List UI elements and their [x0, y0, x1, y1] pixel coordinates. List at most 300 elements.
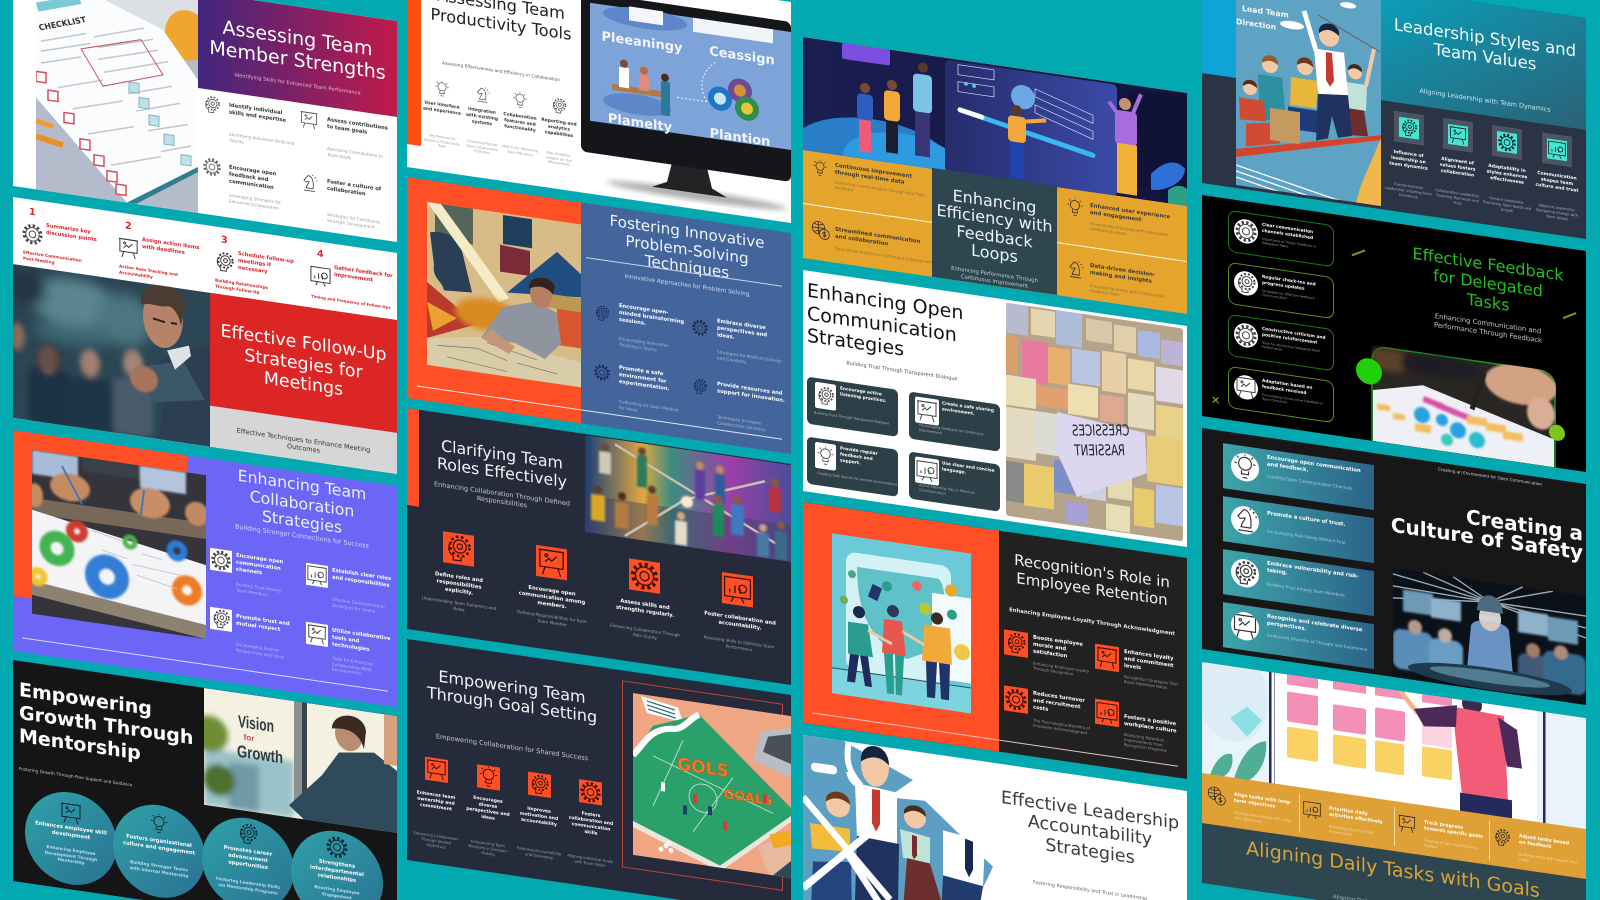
image: hands drawing gears	[32, 450, 206, 640]
subtitle: Empowering Collaboration for Shared Success	[436, 732, 588, 762]
item: prioritize	[1301, 793, 1393, 847]
item note: Creating Open Communication Channels	[1267, 473, 1352, 491]
item title: Fosters a positive workplace culture	[1124, 714, 1177, 734]
item title: Foster a culture of collaboration	[327, 179, 381, 197]
orange block	[407, 177, 581, 423]
icon: bulb	[150, 814, 168, 834]
card: diverse perspectives	[1223, 602, 1374, 669]
item: streamlined	[811, 216, 929, 273]
panel: Fostering Innovative Problem-Solving	[407, 177, 791, 454]
item 1	[22, 206, 97, 265]
icon box	[306, 622, 328, 647]
title: Accountability	[1028, 812, 1152, 850]
icon: person	[216, 252, 234, 272]
item: communication	[1532, 128, 1582, 231]
item: loyalty	[1095, 643, 1183, 703]
title: Employee Retention	[1016, 569, 1168, 609]
item note: Building Stronger Teams with Internal Mentorship	[130, 859, 188, 878]
item note: Creating a Daily Goal-Tracking System	[1424, 838, 1477, 850]
item: adaptability	[1482, 121, 1532, 224]
image: Vision for Growth: Growth	[237, 742, 283, 767]
item note: Timing and Frequency of Follow-Ups	[311, 293, 391, 310]
item note: Enhancing Employee Development Through Mentorship	[45, 844, 97, 866]
item: perspectives	[691, 313, 787, 377]
subtitle: Enhancing Employee Loyalty Through Acknowledgment	[1009, 607, 1175, 637]
icon box	[1095, 699, 1119, 727]
title: Roles Effectively	[437, 453, 567, 491]
item title: Enhances employee skill development	[35, 820, 107, 841]
icon	[513, 92, 527, 108]
item title: Align tasks with long-term objectives	[1234, 793, 1292, 809]
circle item 2	[113, 799, 205, 900]
title: Communication	[807, 302, 957, 346]
item title: Recognize and celebrate diverse perspectives.	[1267, 613, 1362, 633]
icon box	[1095, 644, 1119, 672]
panel: Recognition's Role in Employee Retention	[803, 502, 1187, 779]
item note: Understanding Team Dynamics and Roles	[422, 595, 496, 612]
item title: Track progress towards specific goals	[1424, 820, 1483, 840]
panel: Enhancing Open Communication	[803, 270, 1187, 547]
panel: Effective Feedback for Delegated Tasks	[1202, 195, 1586, 472]
item note: Building Trust Through Transparent Dialogue	[814, 411, 889, 426]
number: 1	[29, 206, 36, 218]
image: desktop monitor: Plantion	[710, 126, 770, 150]
item note: Data Analytics: Insights on Tool Effectiveness	[546, 150, 572, 167]
icon box	[1394, 111, 1424, 145]
item note: Enhancing Collaboration Through Role Clarity	[610, 623, 680, 640]
item title: Clear communication channels established	[1262, 223, 1313, 241]
title: Effective Feedback	[1412, 244, 1564, 285]
item title: Fosters organizational culture and engagement	[123, 834, 195, 856]
image: goals field: GOLS	[677, 755, 729, 782]
title: Through Goal Setting	[427, 683, 597, 727]
illustration: celebrating team: Lead Team	[1242, 4, 1289, 20]
title	[19, 679, 193, 765]
item title: Constructive criticism and positive reinforcement	[1262, 327, 1326, 345]
icon box	[815, 442, 836, 471]
title: Leadership Styles and	[1394, 15, 1576, 61]
left divider	[803, 203, 932, 223]
item note: Key Features to Assess in Productivity Tools	[424, 133, 460, 149]
item title: Identify individual skills and expertise	[229, 103, 286, 124]
item title: Communication shapes team culture and trust	[1535, 171, 1579, 194]
subtitle: Effective Techniques to Enhance Meeting	[237, 427, 370, 454]
item note: Effective Communication Strategies for Teams	[332, 597, 385, 613]
item note: Data-Driven Insights for Continuous Improvement	[835, 246, 932, 265]
item: align tasks	[1206, 780, 1298, 833]
subtitle: Building Trust Through Transparent Dialogue	[846, 360, 958, 383]
item title: Improves motivation and accountability	[520, 807, 558, 828]
image: checklist on desk: CHECKLIST	[38, 15, 88, 32]
item title: Create a safe sharing environment.	[942, 401, 994, 417]
item note: Fostering Leadership Skills via Mentorship Programs	[216, 876, 280, 895]
item note: Leveraging Strengths for Enhanced Collaboration	[229, 193, 281, 210]
item note: Building Trust Among Team Members	[1267, 581, 1345, 598]
image: futuristic team table	[1393, 568, 1586, 705]
item 2	[118, 220, 200, 279]
icon	[691, 376, 709, 397]
accent cross: ✕	[1211, 393, 1220, 408]
title: Techniques	[645, 252, 729, 282]
icon: phone feedback	[310, 266, 331, 287]
illustration: leadership team	[803, 735, 999, 900]
icon	[1207, 785, 1227, 808]
icon box	[1004, 629, 1028, 658]
panel: Effective Follow-Up Strategies	[13, 197, 397, 474]
item note: Building Habits that Support Your Goals	[1519, 852, 1577, 865]
item: morale	[1004, 629, 1092, 690]
item: contributions	[300, 111, 388, 160]
illustration: celebrating team	[1236, 0, 1381, 206]
image: hand marking stars	[1371, 345, 1556, 468]
image: sticky notes wall: CRESSICES	[1071, 423, 1130, 440]
item title: Adaptation based on feedback received	[1262, 379, 1312, 396]
icon box	[629, 558, 660, 594]
image: colourful team with ladders	[585, 435, 791, 562]
image: man pointing	[13, 264, 210, 447]
icon box	[210, 607, 232, 632]
item title: Encourage open-minded brainstorming sessions.	[619, 303, 684, 326]
title	[990, 786, 1190, 877]
item title: Streamlined communication and collaboration	[835, 227, 920, 247]
orange strip	[407, 0, 421, 146]
item note: Building Relationships Through Follow-Up	[215, 277, 268, 295]
title: Feedback	[956, 221, 1033, 251]
icon: presentation board	[300, 111, 318, 130]
header band with title	[198, 0, 397, 117]
subtitle: Building Stronger Connections for Success	[235, 523, 369, 550]
icon box	[536, 545, 567, 580]
icon	[811, 219, 831, 242]
title: Effective Follow-Up	[220, 321, 386, 365]
item: turnover	[1004, 684, 1092, 745]
subtitle: Enhancing Communication and	[1435, 312, 1541, 335]
item: influence	[1384, 107, 1433, 210]
subtitle: Enhancing Collaboration Through Defined	[434, 480, 570, 508]
item note: Defining Responsibilities for Each Team Member	[517, 609, 587, 627]
item note: Streamlining Processes with Automated Feedback Systems	[1090, 221, 1167, 237]
panel: Enhancing Efficiency with Feedback Loops	[803, 37, 1187, 314]
title: Creating a	[1466, 505, 1583, 546]
title	[412, 664, 612, 729]
icon	[593, 303, 611, 324]
icon	[1397, 812, 1417, 835]
subtitle	[1388, 305, 1588, 351]
item: communication skills	[567, 777, 615, 884]
panel: Empowering Growth Through Mentorship	[13, 660, 397, 900]
item: define roles	[419, 528, 499, 631]
item note: Servant Leadership: Prioritizing Team Needs and Growth	[1483, 196, 1531, 213]
item title: Encourage open communication among members.	[519, 585, 585, 610]
title: Member Strengths	[209, 37, 386, 84]
number: 3	[221, 234, 228, 246]
title: Clarifying Team	[441, 436, 563, 473]
card: vulnerability	[1223, 549, 1374, 616]
icon box	[443, 531, 474, 567]
item title: User interface and experience	[423, 101, 461, 117]
icon: chess knight	[304, 174, 318, 192]
item title: Enhanced user experience and engagement	[1090, 203, 1170, 223]
item title: Establish clear roles and responsibilities	[332, 568, 391, 589]
card: criticism	[1228, 314, 1334, 371]
icon	[1065, 196, 1085, 219]
icon: gear badge	[203, 158, 221, 176]
title: Loops	[971, 241, 1018, 267]
circle item 3	[202, 812, 294, 900]
item note: Importance of Timely Feedback in Delegated Tasks	[1262, 237, 1316, 249]
panel: Assessing Team Member Strengths	[13, 0, 397, 242]
image: goals field	[633, 693, 791, 878]
item note: Active Listening: Key to Effective Communication	[919, 483, 975, 495]
item: features	[502, 92, 538, 157]
item title: Reduces turnover and recruitment costs	[1033, 691, 1085, 712]
icon circle	[1231, 451, 1259, 483]
title: Strategies for	[244, 345, 363, 383]
image: goals field: GOALS	[723, 787, 773, 809]
number: 2	[125, 220, 132, 232]
icon	[593, 362, 611, 383]
title: Tasks	[1467, 290, 1509, 315]
title: Mentorship	[19, 725, 141, 765]
subtitle band	[210, 406, 397, 474]
item note: Enhancing Communication Through Real-Time Feedback	[835, 180, 925, 198]
item note: Cultivating an Open Mindset for Ideas	[619, 399, 679, 413]
item note: Encouraging Feedback for Continuous Improvement	[919, 423, 983, 436]
title: Effective Leadership	[1001, 788, 1179, 834]
item 3	[215, 234, 294, 295]
item title: Define roles and responsibilities explicitly.	[435, 571, 483, 596]
icon circle	[1231, 557, 1259, 589]
item note: Metrics for Measuring Team Efficiency	[502, 144, 538, 157]
item title: Provide regular feedback and support.	[840, 446, 878, 466]
panel: Assessing Team Productivity Tools	[407, 0, 791, 223]
icon	[691, 317, 709, 338]
item title: Promote a culture of trust.	[1267, 510, 1346, 528]
image: sticky notes wall	[1006, 303, 1183, 541]
icon	[477, 87, 490, 103]
circle item 1	[25, 786, 117, 891]
item note: Aligning Daily Actions with Long-Term Objectives	[1234, 811, 1291, 823]
item: perspectives	[465, 762, 513, 869]
item: culture	[1095, 698, 1183, 758]
item note: Encouraging Diverse Perspectives and Ideas	[236, 642, 284, 659]
item note: Recognition Strategies That Boost Retention Rates	[1124, 674, 1178, 690]
title: for Delegated	[1433, 266, 1543, 301]
circle item 4	[291, 825, 383, 900]
item: open channels	[210, 548, 283, 597]
title: Problem-Solving	[625, 231, 749, 267]
subtitle: Fostering Growth Through Peer Support and Guidance	[19, 766, 132, 787]
item note: Measuring Retention Improvements from Recognition Programs	[1124, 732, 1167, 753]
item: open feedback	[203, 158, 281, 210]
icon	[1492, 826, 1512, 849]
card: trust	[1223, 496, 1374, 563]
icon box	[915, 456, 939, 486]
icon	[435, 80, 449, 96]
icon circle	[1234, 270, 1258, 297]
title block	[932, 168, 1057, 295]
title: Efficiency with	[936, 201, 1053, 236]
panel: Leadership Styles and Team Values	[1202, 0, 1586, 239]
image frame	[622, 680, 783, 891]
right divider	[1057, 242, 1187, 262]
subtitle: Innovative Approaches for Problem Solving	[625, 274, 749, 298]
item note: Encouraging Constructive Feedback in Team Dynamics	[1262, 393, 1323, 406]
item: user experience	[1065, 193, 1185, 255]
image: Vision for Growth	[204, 688, 397, 833]
item: continuous improvement	[811, 156, 929, 217]
item title: Embrace vulnerability and risk-taking.	[1267, 560, 1359, 580]
title	[238, 466, 366, 537]
item title: Boosts employee morale and satisfaction	[1033, 635, 1083, 659]
icon circle	[1234, 374, 1258, 401]
item note: Empowering Teams with Collaborative Feedback Tools	[1090, 283, 1164, 299]
item note: Action Item Tracking and Accountability	[119, 263, 178, 279]
panel: Creating a Culture of Safety	[1202, 428, 1586, 705]
item note: Techniques to Inspire Collaborative Solutions	[717, 414, 765, 432]
icon: board	[118, 238, 138, 259]
card: sharing	[909, 391, 1000, 452]
item title: Schedule follow-up meetings if necessary	[238, 251, 294, 275]
item title: Use clear and concise language.	[942, 461, 994, 476]
item note: Assessing Skills to Optimize Team Performance	[704, 634, 774, 652]
title: Strategies	[807, 325, 904, 361]
title	[587, 209, 787, 291]
item title: Encourage open communication channels	[236, 553, 283, 576]
item title: Continuous improvement through real-time data	[835, 163, 912, 186]
icon box	[1004, 685, 1028, 714]
item title: Enhances team ownership and commitment	[417, 790, 455, 813]
item: data-driven	[1065, 255, 1185, 314]
item title: Enhances loyalty and commitment levels	[1124, 649, 1174, 671]
item note: Comparing Popular Team Collaboration Platforms	[466, 139, 498, 155]
item note: Aligning Individual Goals with Team Vision	[567, 853, 613, 868]
item title: Encourage active listening practices.	[840, 386, 886, 404]
item: trust	[210, 606, 290, 659]
item title: Utilize collaborative tools and technologies	[332, 628, 391, 653]
item title: Fosters collaboration and communication skills	[569, 811, 613, 837]
subtitle: Creating an Environment for Open Communication	[1438, 466, 1542, 487]
panel: Enhancing Team Collaboration	[13, 430, 397, 707]
subtitle: Outcomes	[287, 442, 320, 455]
image: Vision for Growth: for	[244, 733, 254, 743]
orange accent block	[13, 430, 187, 621]
item note: Adaptive Leadership: Navigating Change with Team Values	[1536, 203, 1578, 221]
icon box	[477, 764, 500, 791]
item title: Promote a safe environment for experimentation.	[619, 365, 670, 392]
icon: gears	[326, 836, 348, 858]
item note: Strategies for Problem-Solving and Creativity	[717, 349, 781, 364]
icon	[1065, 258, 1085, 281]
item title: Promote trust and mutual respect	[236, 614, 290, 633]
item: reporting	[539, 91, 579, 167]
item: accountability	[698, 568, 784, 673]
subtitle: Assessing Effectiveness and Efficiency in Collaboration	[442, 61, 560, 83]
item: tools	[306, 622, 391, 676]
item: collaboration culture	[304, 174, 382, 229]
item title: Promotes career advancement opportunities	[224, 845, 272, 871]
header band	[1381, 0, 1586, 130]
subtitle: Continuous Improvement	[961, 274, 1028, 290]
item note: Effective Communication Post-Meeting	[23, 249, 82, 265]
title: Empowering Team	[438, 667, 586, 707]
icon: gear	[22, 224, 43, 244]
item note: Strategies for Effective Feedback Communication	[1262, 289, 1315, 301]
icon box	[815, 382, 836, 411]
item: alignment	[1433, 114, 1482, 217]
item: open communication	[512, 541, 592, 645]
illustration: handshake	[832, 533, 971, 714]
icon circle	[1234, 218, 1258, 245]
item title: Encourage open feedback and communication	[229, 165, 276, 191]
item note: Identifying Individual Skills and Talents	[229, 132, 294, 146]
item note: Tools for Monitoring Delegated Work Performance	[1262, 341, 1320, 353]
title	[1381, 13, 1589, 81]
item title: Assess skills and strengths regularly.	[616, 598, 674, 619]
title	[1388, 240, 1588, 326]
title: Meetings	[264, 369, 343, 400]
title: Empowering	[19, 679, 152, 720]
panel: Effective Leadership Accountability	[803, 735, 1187, 900]
icon	[811, 157, 829, 180]
left accent	[1202, 0, 1236, 78]
icon box	[528, 772, 551, 798]
card: clear language	[909, 451, 1000, 512]
orange strip	[407, 408, 419, 507]
icon circle	[1231, 504, 1259, 536]
title: Fostering Innovative	[609, 212, 765, 252]
subtitle: Responsibilities	[477, 495, 527, 510]
item note: Collaborative Leadership: Fostering Teamwork and Trust	[1435, 188, 1480, 206]
title: Enhancing Open	[807, 280, 963, 324]
item 4	[310, 248, 393, 310]
item note: Assessing Contributions to Team Goals	[327, 146, 383, 160]
subtitle: Enhancing Performance Through	[951, 266, 1038, 284]
title: Strategies	[1045, 835, 1135, 868]
image: man with puzzle	[427, 202, 581, 387]
title: Productivity Tools	[430, 4, 571, 44]
title: Assessing Team	[223, 17, 372, 60]
item note: Fostering Accountability and Ownership	[517, 846, 561, 860]
image: desktop monitor	[577, 0, 791, 223]
icon box	[915, 396, 939, 426]
item: track progress	[1396, 807, 1488, 861]
card: check-ins	[1228, 262, 1334, 319]
icon box	[306, 563, 328, 588]
item: safe environment	[593, 360, 683, 423]
title: Culture of Safety	[1391, 513, 1583, 565]
subtitle: Identifying Skills for Enhanced Team Performance	[234, 72, 361, 97]
item: clear roles	[306, 562, 391, 613]
icon box	[425, 757, 448, 783]
accent circle lime	[1549, 424, 1565, 442]
item: user interface	[423, 80, 461, 149]
title: Collaboration	[250, 486, 354, 520]
card: listening	[807, 377, 898, 437]
panel: Clarifying Team Roles	[407, 408, 791, 685]
icon	[1302, 799, 1322, 822]
item title: Embrace diverse perspectives and ideas.	[717, 318, 767, 340]
item note: Empowering Team Members in Decision-Making	[468, 839, 508, 857]
item note: Strategies for Continuous Strength Development	[327, 212, 380, 229]
card: adaptation	[1228, 366, 1334, 423]
item title: Assign action items with deadlines	[142, 237, 199, 256]
title	[220, 321, 386, 400]
card: regular feedback	[807, 437, 898, 497]
icon box	[1492, 125, 1522, 160]
item note: Creating Safe Spaces for Honest Conversations	[817, 471, 897, 487]
icon circle	[1234, 322, 1258, 349]
